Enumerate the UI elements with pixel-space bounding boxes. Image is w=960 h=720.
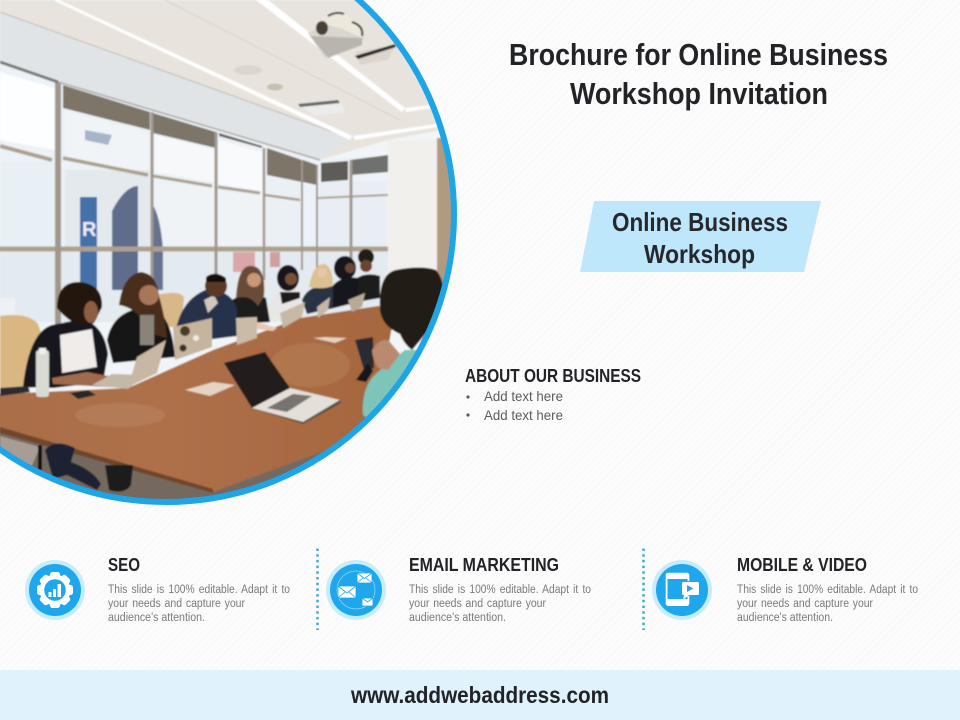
about our business: ABOUT OUR BUSINESS xyxy=(465,366,641,386)
pillar xyxy=(388,140,437,273)
panel: SEO: your needs and capture your xyxy=(108,598,245,610)
rails xyxy=(0,146,388,249)
near person with tablet xyxy=(355,268,444,430)
floor xyxy=(0,428,328,499)
photo: team meeting in a conference room: R xyxy=(82,219,97,241)
windows xyxy=(0,64,388,320)
divider xyxy=(316,548,319,630)
panel: SEO: SEO xyxy=(108,555,140,575)
photo: team meeting in a conference room xyxy=(0,0,470,530)
footer bar with web address: www.addwebaddress.com xyxy=(350,682,609,708)
about our business: Add text here xyxy=(484,407,563,423)
icon: phone with video bubble xyxy=(652,560,712,620)
blinds xyxy=(63,85,388,185)
chairs xyxy=(0,315,42,388)
title: Brochure for Online Business xyxy=(509,37,888,72)
panel: email marketing: your needs and capture your xyxy=(409,598,546,610)
bottle xyxy=(36,350,49,397)
big black laptop xyxy=(224,352,341,424)
workshop badge: Workshop xyxy=(644,239,755,269)
legs under the table xyxy=(45,443,101,490)
papers xyxy=(185,382,235,396)
panel: mobile and video: your needs and capture your xyxy=(737,598,873,610)
panel: mobile and video: audience's attention. xyxy=(737,612,833,624)
workshop badge: Online Business xyxy=(612,207,788,237)
panel: email marketing: This slide is 100% editable. Adapt it to xyxy=(409,584,591,596)
divider xyxy=(642,548,645,630)
icon: envelopes xyxy=(326,560,386,620)
about our business: Add text here xyxy=(484,388,563,404)
phone and dark tablet on the table xyxy=(70,390,96,399)
panel: SEO xyxy=(25,555,290,624)
icon: gear with bar chart xyxy=(25,560,85,620)
photo ring xyxy=(0,0,454,502)
workshop badge xyxy=(580,201,821,272)
silver laptops xyxy=(92,373,134,390)
panel: SEO: This slide is 100% editable. Adapt it to xyxy=(108,584,290,596)
title: Workshop Invitation xyxy=(570,76,828,111)
projector xyxy=(308,13,365,58)
panel: email marketing: EMAIL MARKETING xyxy=(409,555,559,575)
footer bar with web address xyxy=(0,670,960,720)
panel: email marketing: audience's attention. xyxy=(409,612,506,624)
panel: SEO: audience's attention. xyxy=(108,612,205,624)
panel: mobile and video xyxy=(652,555,918,624)
panel: email marketing xyxy=(326,555,591,624)
table xyxy=(0,306,395,492)
panel: mobile and video: This slide is 100% editable. Adapt it to xyxy=(737,584,918,596)
seated people, far to near xyxy=(23,249,380,388)
about our business xyxy=(465,366,641,423)
title xyxy=(509,37,888,111)
panel: mobile and video: MOBILE & VIDEO xyxy=(737,555,867,575)
